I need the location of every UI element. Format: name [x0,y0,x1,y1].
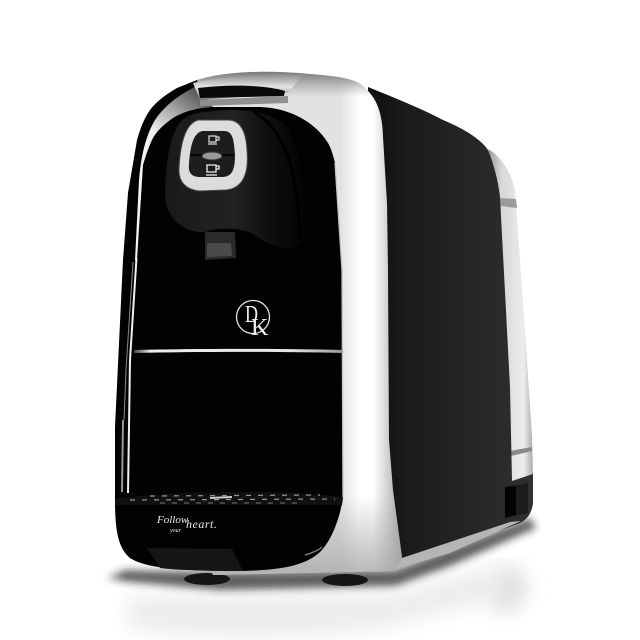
chrome shell [150,72,402,575]
icon: large cup [206,165,219,175]
slogan: your [169,528,182,534]
top lid [193,74,303,106]
control plate [179,120,247,191]
slogan: Follow [156,514,189,526]
water tank [488,149,533,482]
coffee spout [205,232,236,260]
feet [184,573,368,586]
steam selector [202,152,222,160]
black front body [115,80,343,571]
slogan: heart. [186,517,217,531]
slogan [156,514,217,534]
left chrome stripes [122,258,136,493]
button panel [189,131,235,177]
right trim line [335,163,343,497]
upper-left chrome band [135,86,213,260]
side panel [368,87,533,570]
logo [236,300,270,341]
contact shadow [108,518,536,590]
logo: D [245,302,258,328]
drip tray grille [115,492,343,505]
tray front shading [147,548,243,571]
reflection on the table [125,565,525,637]
logo: K [251,315,269,341]
brew head [165,110,304,260]
divider bar [134,349,343,353]
icon: small cup [208,136,219,144]
